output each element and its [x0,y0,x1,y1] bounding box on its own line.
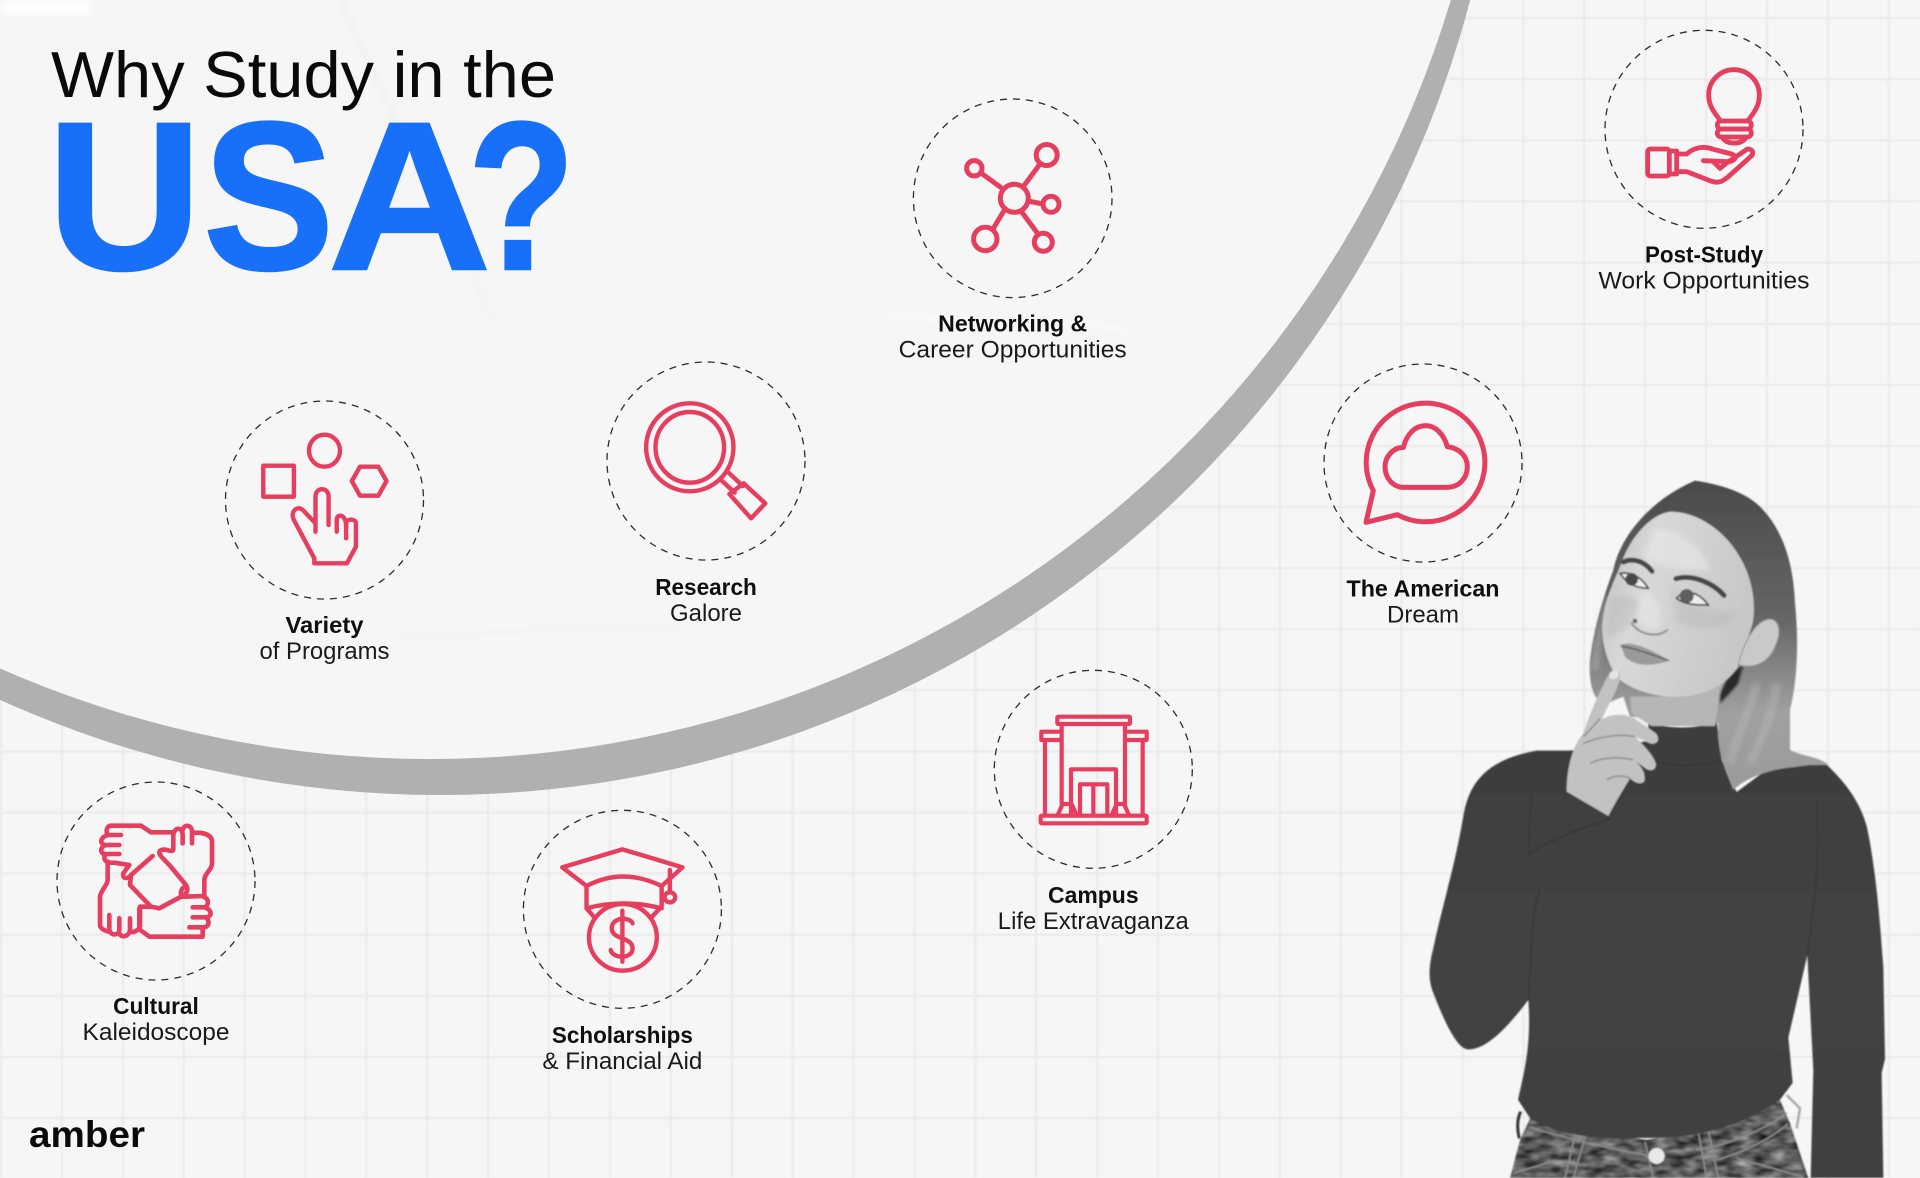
face [1602,512,1754,697]
big word USA?: S [203,79,334,315]
item: networking and career opportunities: Networking & [938,311,1087,337]
facial shading [1605,583,1737,637]
logo: amber: amber [29,1114,145,1155]
fingernail [1608,668,1620,681]
eyebrows [1623,560,1724,595]
item: variety of programs: Variety [286,612,364,638]
title [47,38,575,315]
item: the american dream: Dream [1387,602,1459,628]
hand [1567,671,1658,816]
light circular panel [0,0,1496,759]
neck [1630,677,1727,726]
big word USA?: ? [468,79,575,315]
grey arc band [0,0,1505,795]
big word USA?: U [47,79,202,315]
item: research galore: Research [655,574,757,600]
icon: speech bubble with cloud [1366,403,1485,522]
item: the american dream [1324,364,1522,628]
lips [1621,644,1669,665]
item: scholarships and financial aid: & Financial Aid [542,1048,702,1075]
jeans [1510,1095,1808,1178]
finger folds [1583,718,1635,780]
photo: thinking woman [1430,481,1885,1178]
sweater [1430,721,1885,1178]
ear [1738,619,1779,666]
hair [1590,481,1828,790]
item: campus life extravaganza: Campus [1048,882,1139,908]
item: post-study work opportunities: Post-Study [1645,242,1763,268]
item: cultural kaleidoscope [57,782,255,1046]
item: cultural kaleidoscope: Cultural [113,993,199,1019]
item: cultural kaleidoscope: Kaleidoscope [82,1019,230,1046]
item: scholarships and financial aid: Scholarships [552,1022,693,1048]
nose [1632,623,1667,635]
head [1567,481,1828,816]
icon: campus building [1041,717,1147,823]
icon: joined hands [100,826,212,937]
item: networking and career opportunities [899,99,1127,364]
item: variety of programs: of Programs [260,638,390,665]
icon: magnifying glass [646,403,765,518]
title: Why Study in the [51,38,556,111]
icon: network [967,144,1059,251]
item: variety of programs [226,401,424,665]
icon: hand selecting shapes [263,435,387,563]
item: campus life extravaganza: Life Extravaganza [998,908,1189,935]
item: scholarships and financial aid [523,810,721,1075]
item: networking and career opportunities: Career Opportunities [899,337,1127,364]
item: post-study work opportunities [1598,30,1810,294]
shadow under jaw [1720,665,1743,703]
icon: hand holding light bulb [1648,70,1759,182]
item: post-study work opportunities: Work Opportunities [1598,267,1810,294]
big word USA? [47,79,575,315]
eyes [1620,573,1708,605]
icon: graduation cap and coin [562,849,682,971]
big word USA?: A [328,79,491,314]
item: research galore: Galore [670,600,742,627]
item: the american dream: The American [1346,576,1500,602]
item: research galore [607,362,805,627]
hair highlights [1595,597,1777,763]
item: campus life extravaganza [994,670,1192,935]
paper creases [0,0,1130,640]
